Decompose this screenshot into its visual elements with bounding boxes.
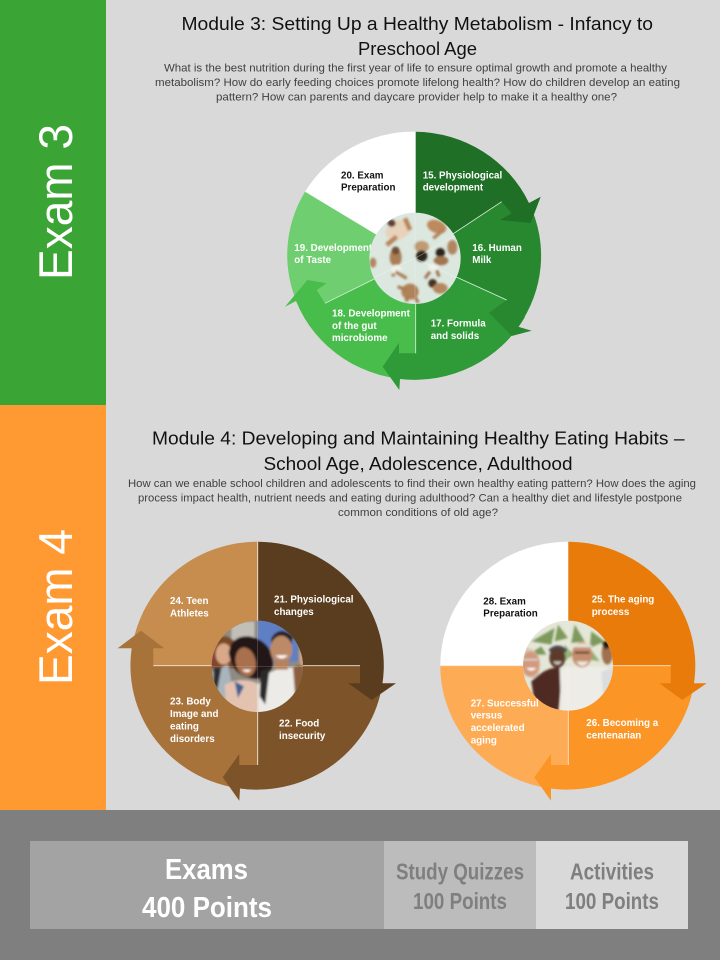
chart: teen wheel	[118, 542, 396, 801]
block: Study Quizzes	[384, 841, 536, 929]
photo: babies crawling	[369, 212, 461, 304]
label: 17: and solids	[431, 331, 480, 342]
heading: Module 3: Preschool Age	[358, 39, 477, 59]
segment 16	[416, 202, 541, 336]
label: 19: of Taste	[294, 255, 332, 266]
label: 28: Preparation	[483, 609, 538, 620]
label: 26: centenarian	[586, 730, 641, 741]
segment 18	[285, 258, 416, 380]
label: 17: 17. Formula	[431, 319, 486, 330]
label: 25: process	[592, 607, 630, 618]
segment 20	[305, 132, 416, 258]
text block: Module 3 description	[155, 62, 680, 104]
photo: older adults	[523, 620, 613, 711]
block: Exams: Exams	[165, 854, 248, 886]
label: 15: 15. Physiological	[423, 170, 502, 181]
label: 20: Preparation	[341, 183, 395, 194]
chart: Module 3 wheel	[285, 132, 541, 390]
panel: points footer	[0, 810, 720, 960]
segment 26	[534, 666, 694, 801]
label: 24: Athletes	[170, 608, 209, 619]
sidebar: Exam 4	[0, 405, 106, 810]
photo: teens	[212, 620, 303, 712]
label: 16: Milk	[472, 255, 492, 266]
segment 28	[440, 542, 568, 666]
label: 28: 28. Exam	[483, 596, 526, 607]
label: 25: 25. The aging	[592, 595, 654, 606]
segment 19	[287, 192, 416, 305]
label: 27: aging	[471, 736, 497, 746]
heading: Module 3	[182, 14, 653, 59]
chart: adult wheel	[440, 542, 707, 801]
label: 18: microbiome	[332, 333, 388, 344]
label: 21: changes	[274, 607, 314, 618]
sidebar: Exam 3: Exam 3	[29, 124, 82, 280]
label: 21: 21. Physiological	[274, 595, 354, 606]
label: 27: versus	[471, 711, 503, 722]
block: Study Quizzes: Study Quizzes	[396, 858, 524, 884]
label: 27: 27. Successful	[471, 699, 539, 710]
label: 15: development	[423, 182, 484, 194]
label: 18: 18. Development	[332, 309, 410, 320]
text block: Module 4 description	[128, 478, 696, 519]
sidebar: Exam 3	[0, 0, 106, 405]
label: 22: insecurity	[279, 731, 326, 742]
text block: Module 3 description: metabolism? How do early feeding choices promote lifelong health? How do children develop an eating	[155, 77, 680, 89]
segment 23	[118, 631, 258, 790]
label: 23: 23. Body	[170, 697, 211, 708]
label: 24: 24. Teen	[170, 596, 208, 607]
heading: Module 3: Module 3: Setting Up a Healthy Metabolism - Infancy to	[182, 14, 653, 34]
segment 24	[131, 542, 258, 666]
label: 22: 22. Food	[279, 719, 319, 730]
segment 27	[440, 666, 568, 790]
label: 20: 20. Exam	[341, 170, 383, 182]
label: 23: eating	[170, 721, 199, 732]
text block: Module 3 description: pattern? How can parents and daycare provider help to make it a healthy one?	[216, 92, 617, 104]
segment 17	[383, 258, 525, 390]
segment 25	[568, 542, 707, 700]
segment 22	[223, 666, 382, 801]
segment 15	[416, 132, 541, 258]
label: 23: Image and	[170, 709, 218, 720]
label: 18: of the gut	[332, 321, 377, 332]
label: 27: accelerated	[471, 723, 525, 734]
text block: Module 4 description: How can we enable school children and adolescents to find their own healthy eating pattern? How does the aging	[128, 478, 696, 490]
block: Study Quizzes: 100 Points	[413, 888, 507, 914]
sidebar: Exam 4: Exam 4	[29, 529, 82, 685]
label: 26: 26. Becoming a	[586, 718, 658, 729]
label: 16: 16. Human	[472, 243, 522, 254]
heading: Module 4: Module 4: Developing and Maintaining Healthy Eating Habits –	[152, 428, 684, 448]
text block: Module 4 description: common conditions of old age?	[338, 507, 498, 519]
block: Exams	[30, 841, 384, 929]
text block: Module 3 description: What is the best nutrition during the first year of life to ensure optimal growth and promote a healthy	[164, 62, 668, 74]
text block: Module 4 description: process impact health, nutrient needs and eating during adulthood? Can a healthy diet and lifestyle postpone	[138, 492, 682, 504]
block: Activities: Activities	[570, 858, 654, 884]
heading: Module 4: School Age, Adolescence, Adulthood	[264, 454, 572, 474]
block: Activities	[536, 841, 688, 929]
heading: Module 4	[152, 428, 684, 474]
block: Exams: 400 Points	[142, 892, 272, 924]
label: 19: 19. Development	[294, 243, 372, 254]
segment 21	[258, 542, 396, 700]
block: Activities: 100 Points	[565, 888, 659, 914]
label: 23: disorders	[170, 734, 215, 745]
